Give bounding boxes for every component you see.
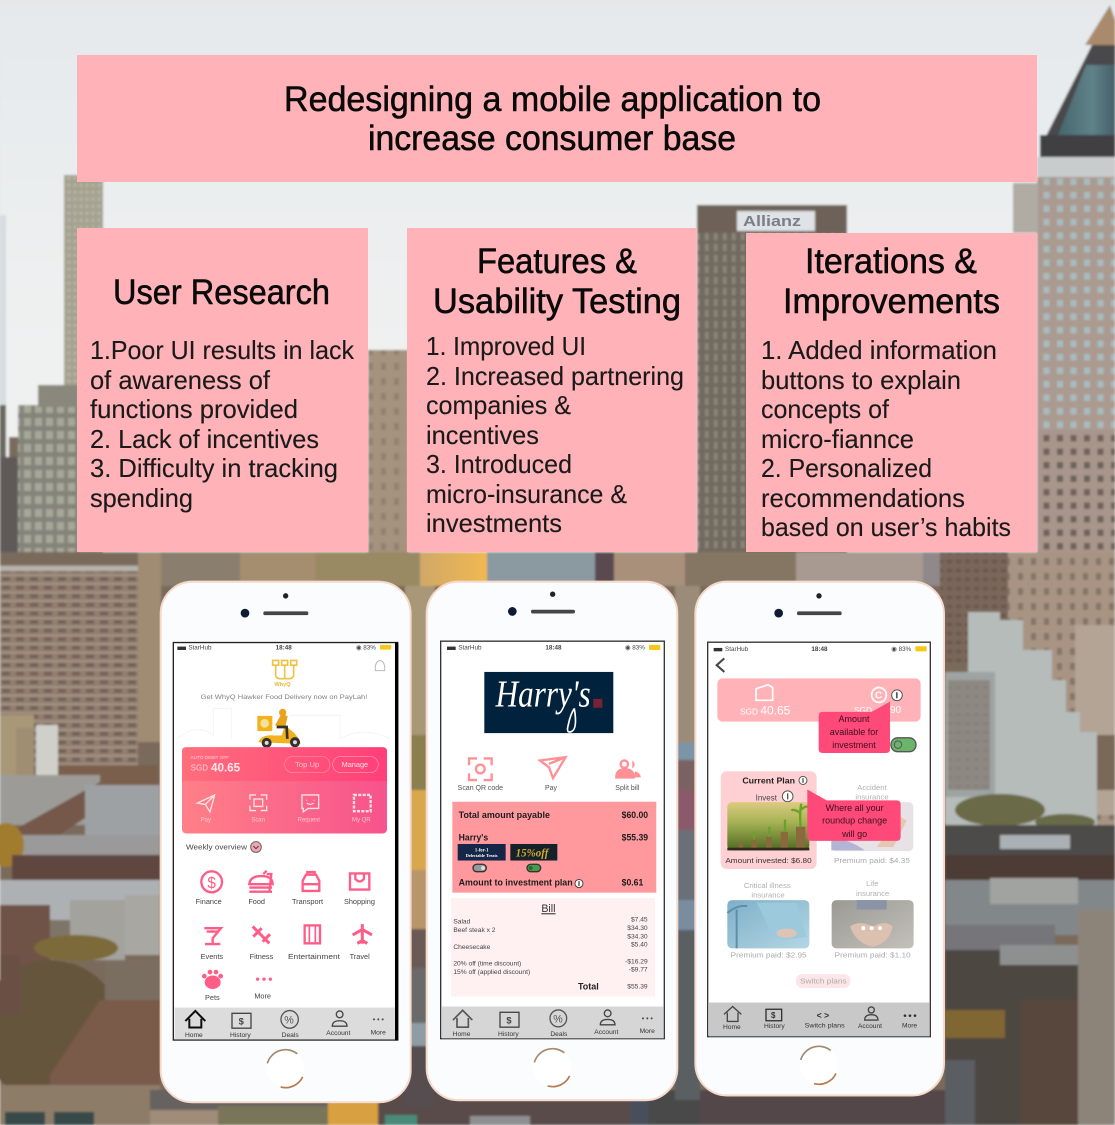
wallet card: SGD [854, 705, 872, 715]
phone: payment screen: Scan QR code [458, 785, 503, 792]
callout: amount available: available for [830, 727, 878, 737]
panel: user research: of awareness of [90, 365, 271, 395]
phone: investment plans screen [695, 582, 944, 1095]
panel: features and usability testing [407, 228, 697, 552]
bill panel: $34.30 [627, 925, 648, 932]
home button [800, 1046, 838, 1084]
promo text: Get WhyQ Hawker Food Delivery now on PayLah! [201, 694, 367, 701]
summary panel: Amount to investment plan [459, 877, 573, 888]
plan: life insurance: Life [866, 879, 878, 888]
bottom navigation [442, 1007, 664, 1038]
icon: more dots [256, 977, 272, 981]
panel: features and usability testing: 1. Improved UI [426, 331, 586, 361]
panel: user research: 3. Difficulty in tracking [90, 453, 338, 483]
phone: home screen [161, 582, 411, 1102]
plan: accident insurance: insurance [855, 793, 889, 802]
bill panel: $5.40 [631, 942, 648, 949]
icon: WhyQ logo [273, 660, 297, 688]
panel: features and usability testing: incentives [426, 420, 539, 450]
title banner: Redesigning a mobile application to [284, 80, 821, 119]
callout: amount available: Amount [838, 714, 870, 724]
bottom navigation: $ [506, 1014, 512, 1025]
balance card: Manage [342, 760, 368, 769]
phone: investment plans screen: StarHub [725, 646, 749, 653]
plan: life insurance [832, 879, 914, 960]
wallet card: SGD [740, 706, 758, 717]
panel: features and usability testing: 2. Increased partnering [426, 361, 684, 391]
switch plans button: Switch plans [800, 977, 847, 986]
bottom navigation: Account [858, 1023, 882, 1030]
panel: iterations and improvements: based on user’s habits [761, 512, 1011, 542]
summary panel: Total amount payable [459, 810, 550, 820]
bottom navigation: History [498, 1031, 519, 1038]
phone: home screen: 18:48 [276, 645, 292, 652]
panel: iterations and improvements: buttons to explain [761, 365, 961, 395]
panel: iterations and improvements: 1. Added information [761, 335, 997, 365]
plan: accident insurance: Accident [857, 783, 888, 792]
bottom navigation: Home [453, 1031, 471, 1038]
balance card: Pay [201, 817, 211, 823]
illustration: delivery scooter [177, 708, 390, 748]
callout: amount available [819, 702, 890, 753]
icon: WhyQ logo: WhyQ [274, 682, 291, 688]
bill panel: Salad [453, 919, 471, 926]
bottom navigation: Deals [550, 1031, 568, 1038]
bottom navigation: % [284, 1014, 294, 1026]
summary panel: $60.00 [622, 810, 648, 820]
bottom navigation: < > [817, 1011, 829, 1021]
phone: payment screen [427, 582, 677, 1100]
plan: life insurance: insurance [856, 889, 889, 898]
plan: critical illness insurance: insurance [751, 891, 785, 900]
bill panel: Bill [541, 903, 556, 915]
summary panel: $55.39 [622, 833, 648, 843]
panel: user research: functions provided [90, 394, 298, 424]
phone: payment screen: Pay [545, 785, 557, 792]
phone: investment plans screen: ◉ 83% [891, 646, 912, 653]
balance card: Request [298, 817, 320, 823]
bottom navigation: Deals [282, 1032, 299, 1039]
summary panel: $0.61 [622, 877, 643, 888]
panel: user research: User Research [113, 273, 330, 312]
panel: user research: 2. Lack of incentives [90, 424, 319, 454]
wallet card: C [875, 691, 882, 702]
bottom navigation: Home [185, 1032, 203, 1039]
bottom navigation [709, 1002, 930, 1036]
bottom navigation: More [371, 1029, 386, 1036]
category grid: $ [207, 875, 216, 892]
current plan card [721, 771, 817, 869]
phone: home screen: Fitness [250, 952, 274, 961]
panel: features and usability testing: investments [426, 508, 562, 538]
bill panel: Beef steak x 2 [453, 927, 496, 934]
panel: iterations and improvements [746, 233, 1037, 552]
callout: roundup change: will go [841, 829, 867, 839]
callout: roundup change: Where all your [826, 803, 884, 813]
bottom navigation: Account [594, 1029, 619, 1036]
toggle [891, 738, 916, 752]
panel: features and usability testing: companies & [426, 390, 571, 420]
balance card: AUTO DEBIT OFF [191, 755, 229, 760]
bottom navigation: More [902, 1022, 917, 1030]
bottom navigation [175, 1008, 395, 1039]
bill panel [451, 898, 655, 996]
callout: roundup change: roundup change [822, 816, 887, 826]
panel: user research [77, 228, 368, 552]
bottom navigation: Account [326, 1030, 351, 1037]
phone: payment screen: 18:48 [545, 645, 562, 652]
logo: Harry's [484, 672, 613, 733]
plan: critical illness insurance: Critical illness [744, 881, 791, 890]
bottom navigation: % [553, 1013, 563, 1025]
bill panel: -$9.77 [629, 967, 648, 974]
phone: payment screen: ◉ 83% [625, 645, 645, 652]
balance card: My QR [352, 817, 371, 823]
icon: paw [202, 970, 223, 989]
bill panel: -$16.29 [625, 958, 648, 965]
wallet card: 90 [890, 705, 901, 716]
summary panel: Harry's [459, 833, 488, 843]
current plan card: Amount invested: $6.80 [725, 856, 812, 865]
phone: home screen: Shopping [344, 897, 375, 906]
phone: home screen: Finance [196, 897, 222, 906]
phone: home screen: Food [248, 897, 265, 906]
weekly overview [186, 842, 261, 852]
phone: home screen: Travel [350, 952, 370, 961]
title banner [77, 55, 1037, 182]
bottom navigation: $ [771, 1011, 776, 1020]
phone: home screen: Pets [205, 993, 220, 1002]
bottom navigation: History [764, 1023, 785, 1030]
plan: life insurance: Premium paid: $1.10 [835, 950, 911, 960]
bottom navigation: More [640, 1028, 655, 1035]
balance card: Scan [251, 817, 265, 823]
balance card: Top Up [295, 760, 319, 769]
summary panel: 15%off [516, 847, 550, 860]
panel: iterations and improvements: 2. Personalized [761, 453, 932, 483]
weekly overview: Weekly overview [186, 843, 247, 852]
panel: iterations and improvements: micro-fiannce [761, 424, 914, 454]
panel: features and usability testing: Features & [477, 242, 637, 281]
panel: iterations and improvements: Improvements [783, 282, 1000, 321]
phone: home screen: ◉ 83% [356, 645, 376, 652]
current plan card: Current Plan [742, 775, 795, 785]
panel: iterations and improvements: concepts of [761, 394, 890, 424]
panel: user research: spending [90, 483, 193, 513]
bottom navigation: $ [239, 1015, 245, 1026]
balance card: SGD [191, 763, 208, 772]
balance card [182, 747, 387, 834]
phone: home screen: Entertainment [288, 952, 340, 961]
logo: Harry's: Harry's [495, 675, 591, 716]
panel: features and usability testing: 3. Introduced [426, 449, 572, 479]
panel: iterations and improvements: Iterations & [805, 242, 977, 281]
panel: features and usability testing: Usability Testing [433, 282, 681, 321]
phone: home screen: StarHub [188, 644, 212, 651]
bottom navigation: History [230, 1032, 251, 1039]
summary panel [452, 802, 656, 893]
background sign: Allianz: Allianz [743, 213, 801, 230]
phone: home screen: More [254, 991, 271, 1000]
plan: accident insurance [831, 783, 913, 865]
bottom navigation: Switch plans [805, 1022, 845, 1030]
current plan card: Invest [756, 793, 778, 802]
panel: user research: 1.Poor UI results in lack [90, 335, 355, 365]
callout: amount available: investment [832, 740, 876, 750]
bill panel: 15% off (applied discount) [453, 969, 530, 976]
summary panel: 1-for-1 [475, 848, 489, 853]
bill panel: 20% off (time discount) [453, 960, 521, 967]
home button [266, 1049, 304, 1088]
wallet card: 40.65 [760, 703, 791, 718]
bill panel: $55.39 [627, 983, 648, 990]
phone: investment plans screen: 18:48 [811, 646, 828, 653]
action icons [469, 757, 641, 780]
phone: home screen: Events [201, 952, 223, 961]
phone: home screen: Transport [292, 897, 323, 906]
phone: payment screen: Split bill [615, 785, 640, 792]
bill panel: Cheesecake [453, 944, 491, 951]
panel: iterations and improvements: recommendations [761, 483, 965, 513]
bill panel: $7.45 [631, 917, 648, 924]
bill panel: Total [578, 981, 599, 991]
icon: back arrow [717, 658, 724, 672]
panel: features and usability testing: micro-insurance & [426, 479, 627, 509]
bill panel: $34.30 [627, 933, 648, 940]
phone: payment screen: StarHub [458, 645, 482, 652]
bottom navigation: Home [723, 1024, 741, 1031]
plan: accident insurance: Premium paid: $4.35 [834, 856, 910, 865]
wallet card [717, 678, 921, 722]
summary panel: Delectable Treats [466, 853, 498, 858]
balance card: 40.65 [211, 761, 241, 774]
title banner: increase consumer base [368, 119, 736, 158]
plan: critical illness insurance: Premium paid: $2.95 [731, 950, 807, 960]
plan: critical illness insurance [727, 881, 809, 960]
category grid [201, 871, 372, 944]
home button [533, 1048, 571, 1087]
callout: roundup change [807, 790, 901, 841]
switch plans button [796, 974, 850, 988]
icon: notification bell [375, 660, 385, 671]
